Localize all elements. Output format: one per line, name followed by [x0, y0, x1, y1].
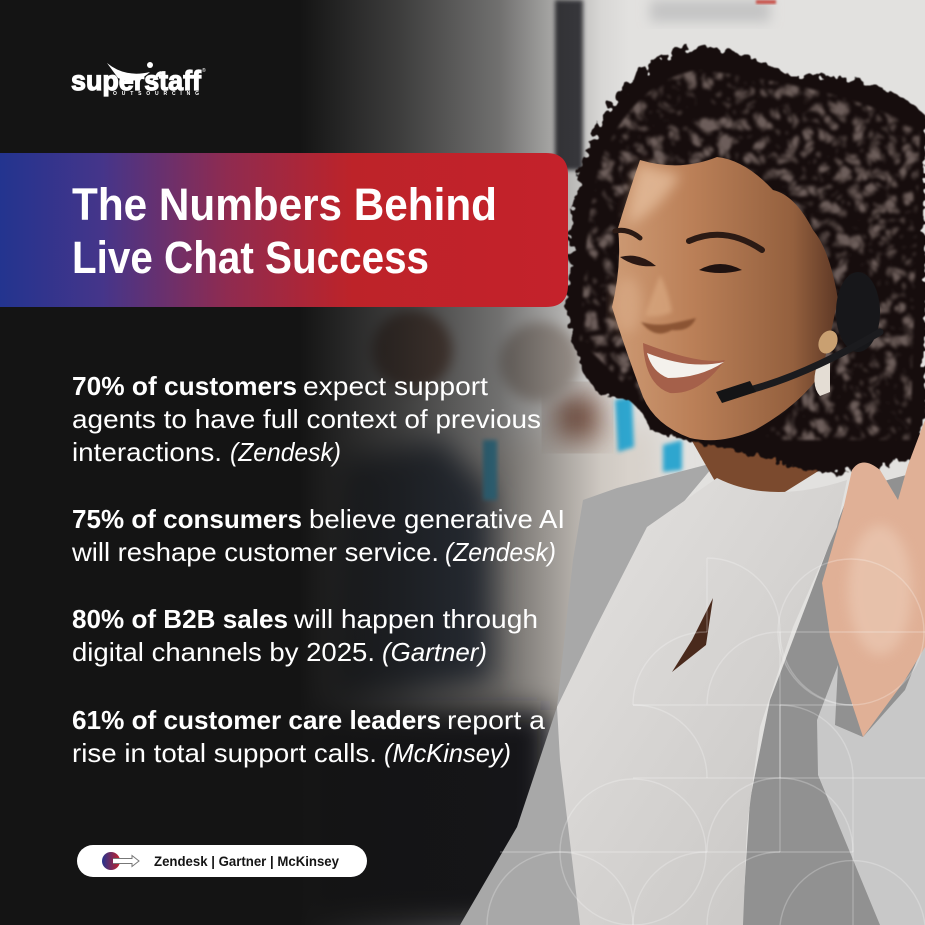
headset microphone boom: [722, 332, 880, 396]
stat 1: 70% of customers: 70% of customers: [72, 371, 297, 401]
logo: superstaff outsourcing: [71, 62, 206, 97]
stat 3: 80% of B2B sales: digital channels by 2025.: [72, 637, 375, 667]
stat 1: 70% of customers: interactions.: [72, 437, 222, 467]
blurred red ceiling spot: [756, 0, 776, 4]
title line 2: Live Chat Success: [72, 232, 429, 283]
blouse keyhole: [672, 598, 713, 672]
stat 1: 70% of customers: agents to have full context of previous: [72, 404, 541, 434]
stat 2: 75% of consumers: [71, 504, 565, 567]
stat 1: 70% of customers: (Zendesk): [230, 437, 341, 467]
headset ear cup: [836, 272, 880, 352]
stat 4: 61% of customer care leaders: 61% of customer care leaders: [72, 705, 441, 735]
jacket right: [742, 470, 925, 925]
neck: [680, 400, 820, 495]
eyebrows: [615, 230, 762, 250]
stat 3: 80% of B2B sales: (Gartner): [382, 637, 487, 667]
face: [612, 157, 838, 440]
logo tagline: OUTSOURCING: [113, 91, 199, 97]
eyes: [620, 256, 742, 273]
stat 4: 61% of customer care leaders: report a: [447, 705, 546, 735]
blurred dark column: [555, 0, 583, 170]
title line 1: The Numbers Behind: [72, 179, 497, 230]
sources text: Zendesk | Gartner | McKinsey: [154, 854, 339, 869]
white blouse: [557, 478, 847, 925]
hair: [568, 48, 925, 472]
raised hand: [822, 420, 925, 737]
stat 4: 61% of customer care leaders: (McKinsey): [384, 738, 511, 768]
source pill: [77, 845, 367, 877]
nose highlight: [645, 275, 672, 316]
blurred blue accents: [615, 396, 682, 472]
sleeve: [817, 640, 925, 925]
blurred colleague: brown skin and shoulder: [555, 395, 600, 440]
logo registered mark: ®: [202, 67, 206, 74]
blurred colleague: grey hair: [500, 322, 580, 402]
pill background: [77, 845, 367, 877]
logo figure head: [147, 62, 153, 68]
icon: gradient dot with arrow: [102, 852, 139, 870]
stat 2: 75% of consumers: (Zendesk): [445, 537, 556, 567]
stat 3: 80% of B2B sales: will happen through: [293, 604, 538, 634]
decorative line pattern: [487, 558, 925, 925]
cheek highlight: [614, 277, 642, 333]
blurred lower desk: [300, 710, 550, 925]
blurred ceiling band: [650, 0, 770, 22]
stat 3: 80% of B2B sales: [72, 604, 538, 667]
blurred colleague: navy shirt: [330, 440, 492, 700]
stat 4: 61% of customer care leaders: [72, 705, 546, 768]
blurred colleague: light shirt: [440, 420, 670, 730]
stat 2: 75% of consumers: believe generative AI: [309, 504, 565, 534]
stat 2: 75% of consumers: will reshape customer service.: [71, 537, 439, 567]
stat 3: 80% of B2B sales: 80% of B2B sales: [72, 604, 288, 634]
banner background: [0, 153, 568, 307]
photo: woman with headset: [460, 48, 925, 925]
headset microphone: [716, 381, 756, 403]
logo swoosh: [107, 63, 164, 84]
stat 1: 70% of customers: expect support: [303, 371, 489, 401]
stat 4: 61% of customer care leaders: rise in total support calls.: [72, 738, 377, 768]
earring: [814, 327, 841, 396]
stat 1: 70% of customers: [72, 371, 541, 467]
blurred colleague: brown-haired man: [372, 310, 452, 390]
logo wordmark: superstaff: [71, 65, 202, 96]
nose shadow: [641, 318, 696, 334]
forehead highlight: [628, 165, 680, 225]
jacket left: [460, 462, 717, 925]
palm highlight: [848, 525, 912, 655]
title banner: [0, 153, 568, 307]
stat 2: 75% of consumers: 75% of consumers: [72, 504, 302, 534]
mouth: [643, 343, 725, 393]
